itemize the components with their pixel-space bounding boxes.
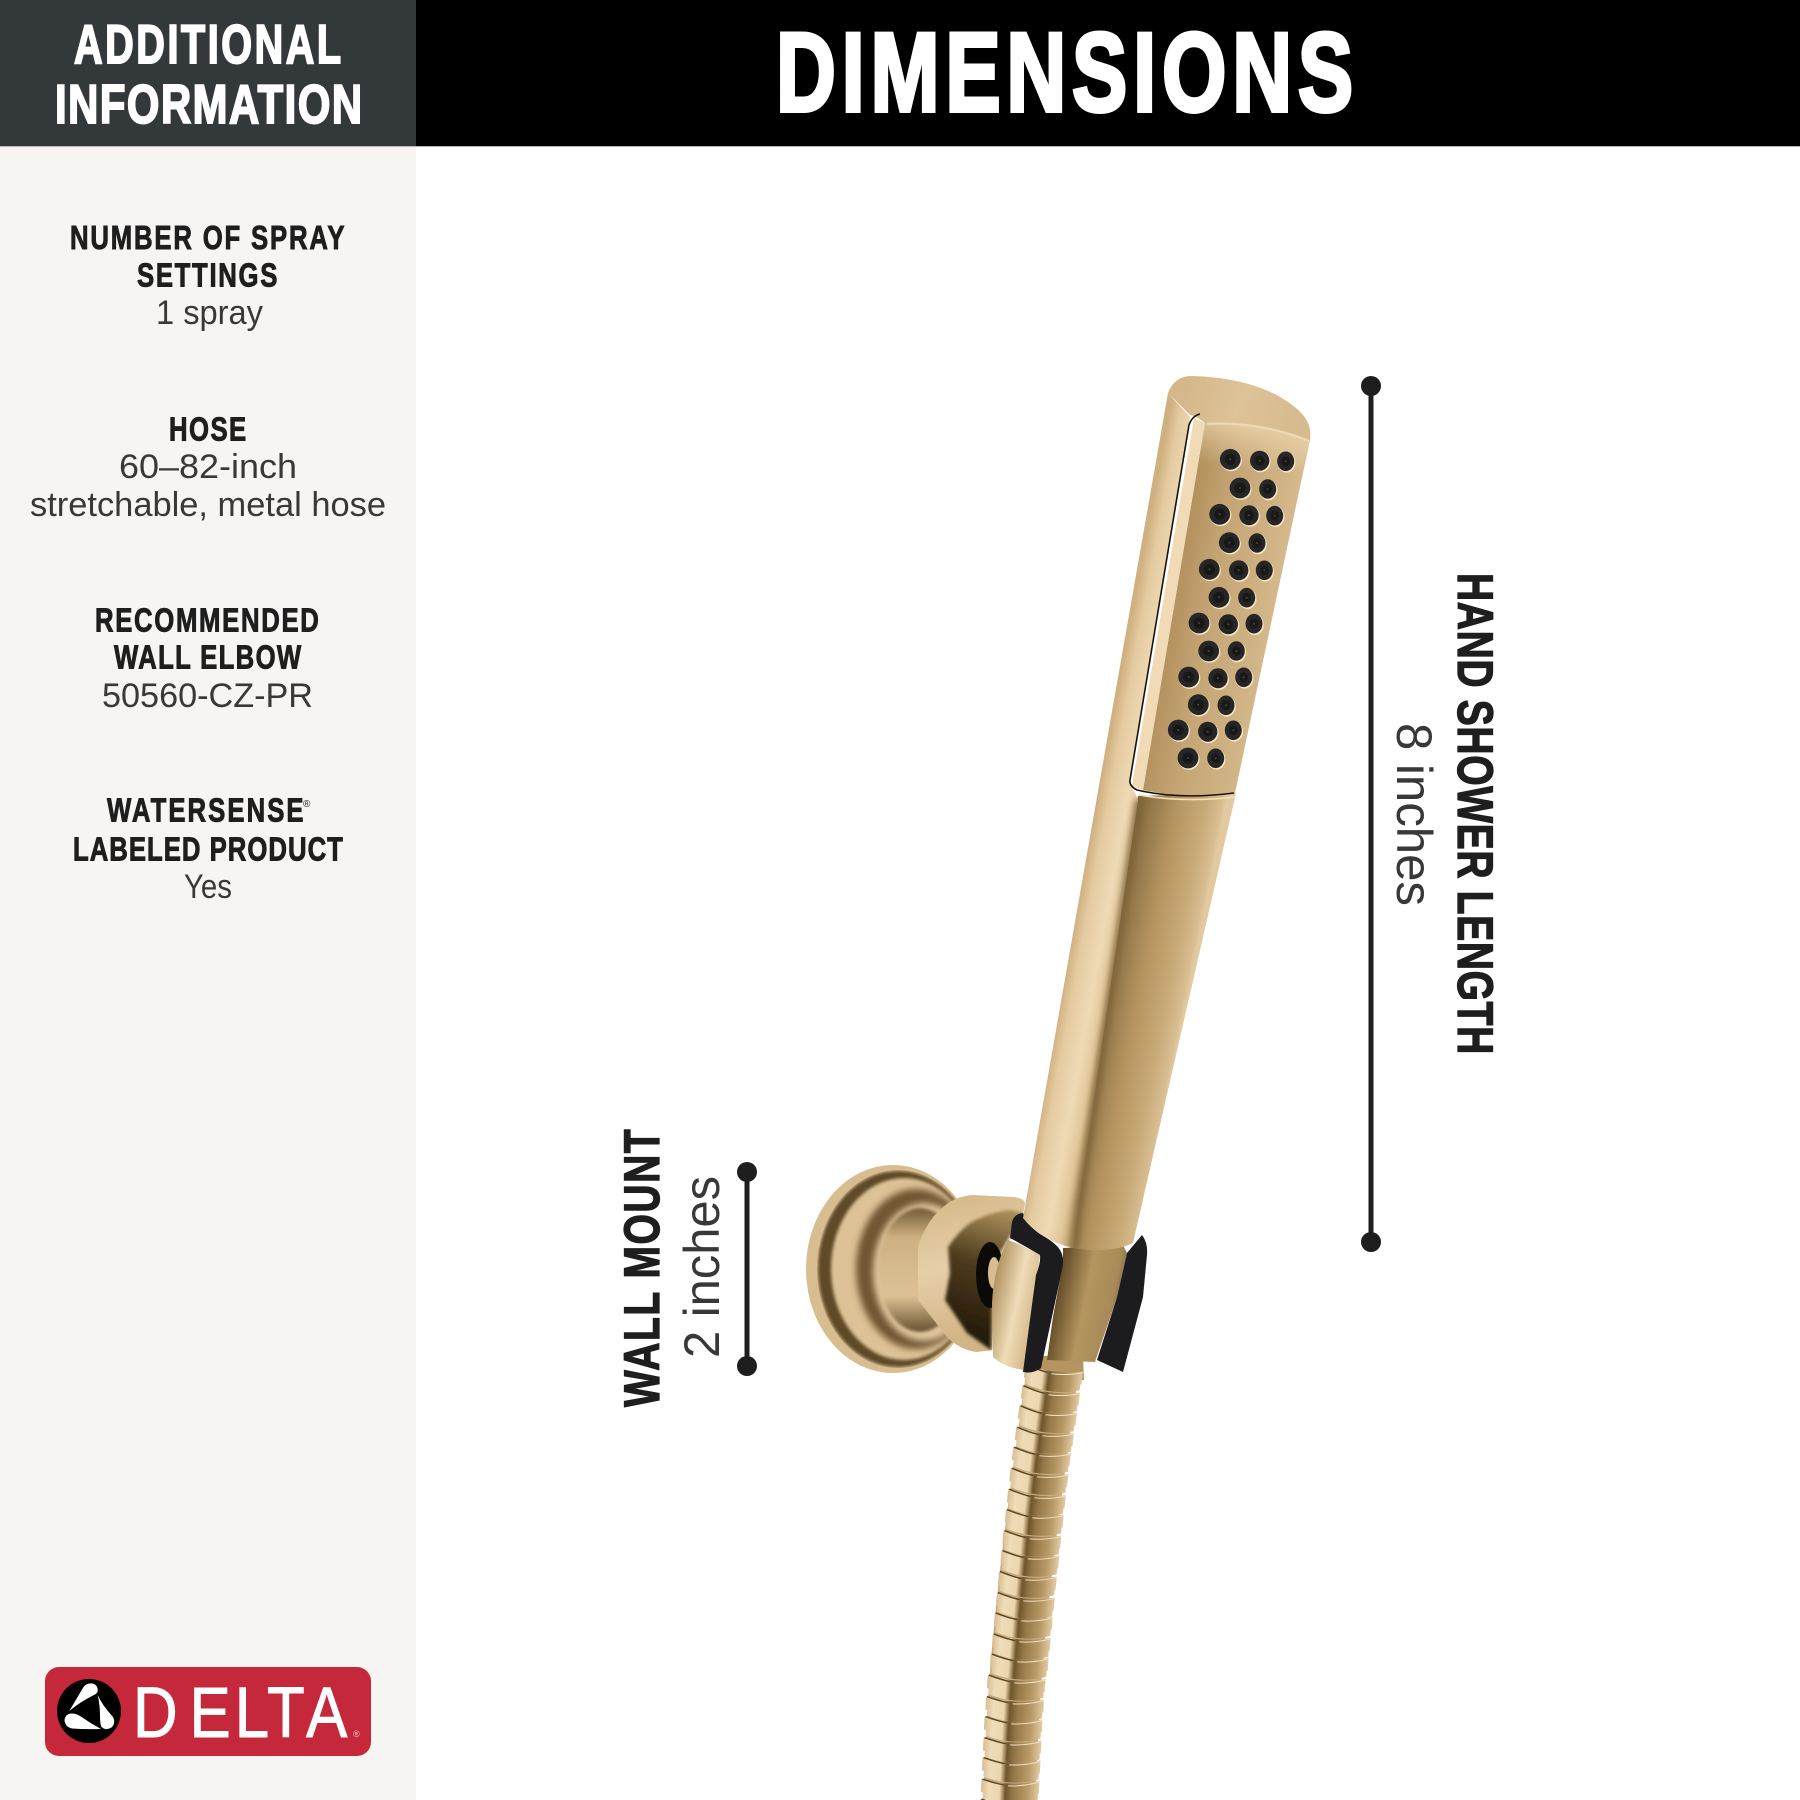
value: 8 inches: 8 inches	[1386, 723, 1442, 906]
spec: hose	[30, 412, 386, 524]
holder body	[1047, 1245, 1127, 1362]
spray head face	[1132, 418, 1310, 796]
icon: delta triangle mark	[57, 1679, 121, 1743]
hose	[980, 1356, 1084, 1800]
spray nozzles	[1168, 449, 1296, 770]
wall mount neck	[878, 1208, 962, 1332]
spec: number of spray settings: 1 spray	[156, 294, 263, 332]
header: additional information: ADDITIONAL	[74, 15, 341, 76]
dimension: hand shower length	[1361, 376, 1504, 1252]
spec: recommended wall elbow	[95, 603, 319, 715]
black clip left	[1010, 1213, 1063, 1372]
label: wall mount: WALL MOUNT	[613, 1129, 670, 1407]
handle lower body, shadow side	[1073, 793, 1236, 1250]
spray head top cap	[1168, 376, 1310, 440]
logo: delta: ®	[353, 1729, 360, 1739]
spec: hose: HOSE	[169, 412, 246, 448]
handle body, light side	[1023, 393, 1190, 1248]
value: 2 inches: 2 inches	[674, 1176, 730, 1358]
dimension: wall mount	[613, 1129, 757, 1407]
spec: recommended wall elbow: RECOMMENDED	[95, 603, 319, 639]
dimension line: 8 inches	[1361, 376, 1381, 1252]
label: hand shower length: HAND SHOWER LENGTH	[1447, 573, 1504, 1054]
logo: delta	[45, 1667, 371, 1756]
title: dimensions: DIMENSIONS	[776, 10, 1353, 135]
spec: watersense labeled product: ®	[303, 799, 311, 810]
panel: additional information sidebar	[0, 146, 416, 1800]
wordmark: delta: DELTA	[133, 1674, 348, 1753]
wall mount flange	[806, 1165, 957, 1373]
swivel nut	[918, 1195, 1025, 1352]
header: additional information	[0, 0, 416, 147]
spec: hose: stretchable, metal hose	[30, 486, 386, 524]
product: hand shower with wall mount and hose	[806, 376, 1310, 1800]
spec: watersense labeled product	[73, 793, 343, 906]
handle shadow edge	[1074, 800, 1139, 1250]
spec: recommended wall elbow: 50560-CZ-PR	[102, 677, 313, 715]
spec: number of spray settings: SETTINGS	[137, 258, 277, 294]
spec: watersense labeled product: Yes	[184, 868, 232, 906]
spec: number of spray settings: NUMBER OF SPRAY	[70, 220, 345, 257]
spec: watersense labeled product: WATERSENSE	[107, 793, 304, 829]
spray head seam	[1130, 414, 1234, 796]
black clip right	[1097, 1235, 1147, 1372]
dimension line: 2 inches	[737, 1162, 757, 1376]
spec: hose: 60–82-inch	[119, 448, 297, 486]
spec: number of spray settings	[70, 220, 345, 332]
header: additional information: INFORMATION	[55, 75, 362, 135]
header: dimensions bar	[416, 0, 1800, 147]
spec: watersense labeled product: LABELED PRODUCT	[73, 832, 343, 868]
spec: recommended wall elbow: WALL ELBOW	[114, 640, 301, 676]
holder swivel arm	[992, 1240, 1040, 1370]
